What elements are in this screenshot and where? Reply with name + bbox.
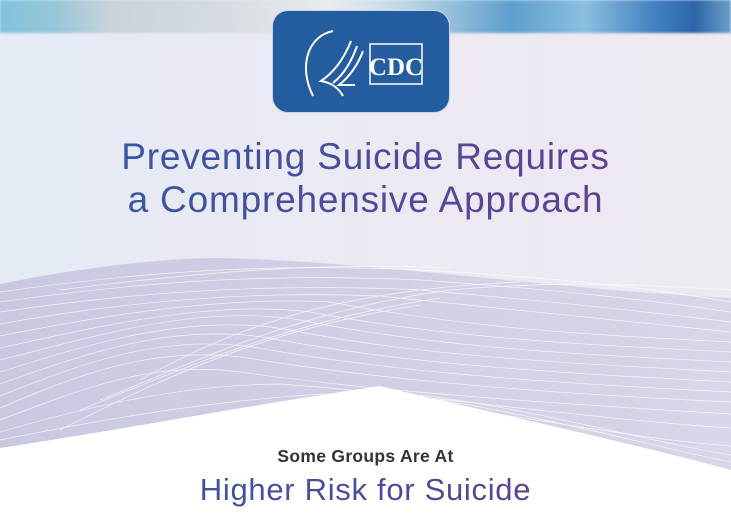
title: Preventing Suicide Requires — [121, 136, 610, 177]
icon: HHS eagle — [306, 31, 363, 96]
title — [0, 135, 731, 221]
icon: CDC box — [369, 44, 423, 84]
top photo strip — [0, 0, 731, 33]
subheading: Some Groups Are At — [277, 446, 454, 466]
heading: higher risk: Higher Risk for Suicide — [200, 472, 531, 507]
logo: HHS and CDC — [272, 10, 450, 113]
heading: higher risk — [0, 472, 731, 508]
icon: CDC box: CDC — [369, 54, 423, 81]
title: a Comprehensive Approach — [128, 179, 603, 220]
